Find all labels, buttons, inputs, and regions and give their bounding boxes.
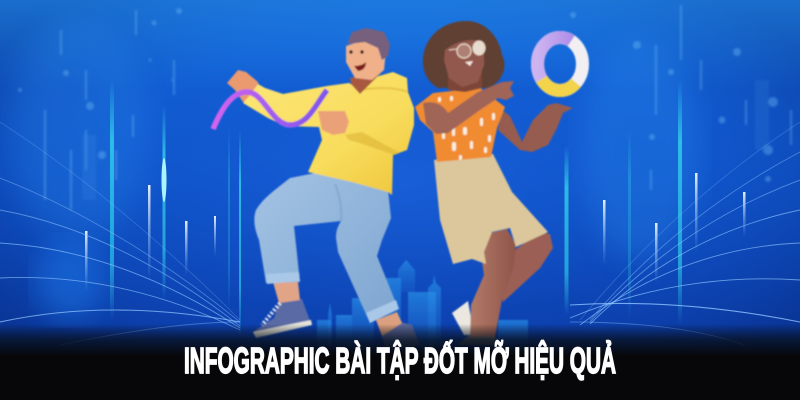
man: hoodie bbox=[243, 72, 414, 195]
background: vertical light streaks bbox=[85, 80, 746, 340]
man: neck bbox=[350, 72, 382, 94]
ring: donut bbox=[538, 38, 582, 91]
woman: shorts bbox=[434, 154, 548, 264]
woman: glasses bbox=[449, 41, 485, 58]
woman: back leg bbox=[498, 232, 553, 302]
squiggle tube bbox=[213, 90, 327, 129]
man: front shoe bbox=[382, 322, 420, 350]
man: mouth bbox=[354, 62, 366, 71]
man: hair bbox=[347, 28, 390, 60]
woman: front leg bbox=[470, 229, 516, 337]
man: jeans crease bbox=[335, 184, 341, 221]
woman: far arm bbox=[498, 103, 573, 152]
bottom dark fade bbox=[0, 324, 800, 400]
woman: gray shoe bbox=[458, 334, 498, 345]
background: curved light lines bbox=[0, 122, 800, 345]
woman: face bbox=[444, 38, 484, 87]
woman: fringe bbox=[445, 35, 484, 50]
man: jeans cuffs bbox=[266, 272, 399, 323]
man: right hand bbox=[318, 111, 349, 135]
woman: mouth bbox=[465, 61, 473, 66]
woman: near arm bbox=[423, 81, 514, 134]
man: left hand bbox=[227, 70, 259, 102]
man bbox=[213, 28, 420, 350]
woman: top dots bbox=[438, 96, 495, 160]
man: eyes bbox=[349, 50, 364, 54]
background: city skyline bbox=[317, 260, 528, 350]
man: rear shoe bbox=[253, 299, 312, 338]
woman: hair bbox=[423, 21, 504, 88]
man: front ankle bbox=[376, 312, 402, 336]
woman: orange top bbox=[415, 88, 505, 162]
man: hood fold bbox=[360, 88, 408, 92]
background: data dots bbox=[18, 5, 792, 210]
man: hoodie shading bbox=[345, 132, 400, 155]
woman bbox=[415, 21, 582, 345]
woman: white shoe bbox=[452, 301, 474, 335]
man: jeans bbox=[254, 172, 398, 323]
man: rear ankle bbox=[273, 282, 300, 303]
woman: neck bbox=[448, 72, 482, 92]
man: face bbox=[346, 38, 386, 80]
